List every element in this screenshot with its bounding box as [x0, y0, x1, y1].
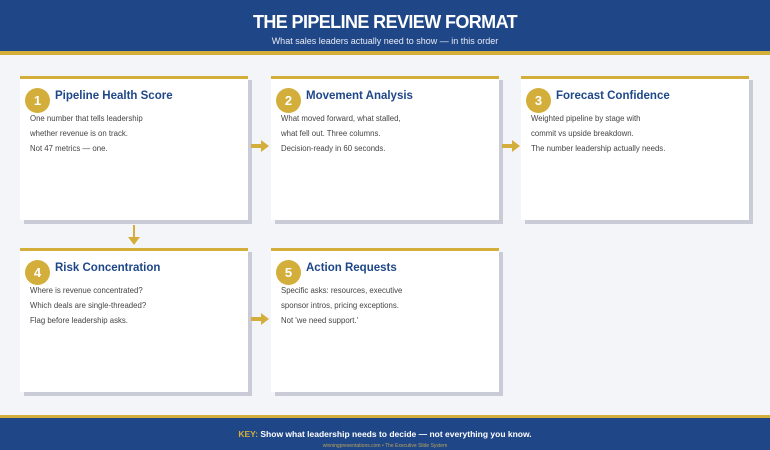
card 3: commit vs upside breakdown. — [531, 129, 634, 138]
card 2: What moved forward, what stalled, — [281, 114, 401, 123]
header — [0, 0, 770, 55]
header: What sales leaders actually need to show — in this order — [272, 36, 498, 46]
card 4 — [20, 248, 248, 392]
arrow down to 4 — [128, 225, 140, 245]
footer: winningpresentations.com • The Executive Slide System — [323, 443, 447, 449]
card 1: Not 47 metrics — one. — [30, 144, 108, 153]
card 5: Not 'we need support.' — [281, 316, 358, 325]
card 3: The number leadership actually needs. — [531, 144, 665, 153]
card 1: 1 — [34, 93, 41, 108]
card 5: 5 — [285, 265, 292, 280]
footer: KEY: Show what leadership needs to decide — not everything you know. — [238, 429, 532, 439]
card 3: 3 — [535, 93, 542, 108]
card 2 — [271, 76, 499, 220]
card 2: what fell out. Three columns. — [281, 129, 381, 138]
card 4: Which deals are single-threaded? — [30, 301, 146, 310]
card 1: whether revenue is on track. — [30, 129, 128, 138]
card 3 — [521, 76, 749, 220]
card 4: 4 — [34, 265, 41, 280]
card 4: Where is revenue concentrated? — [30, 286, 143, 295]
card 5: Specific asks: resources, executive — [281, 286, 402, 295]
card 5 — [271, 248, 499, 392]
card 1 — [20, 76, 248, 220]
card 3: Forecast Confidence — [556, 90, 670, 102]
card 2: Decision-ready in 60 seconds. — [281, 144, 385, 153]
card 4: Flag before leadership asks. — [30, 316, 128, 325]
card 3: Weighted pipeline by stage with — [531, 114, 641, 123]
header: THE PIPELINE REVIEW FORMAT — [253, 12, 517, 32]
card 5: Action Requests — [306, 262, 397, 274]
footer — [0, 415, 770, 450]
arrow 2 to 3 — [502, 140, 520, 152]
arrow 1 to 2 — [251, 140, 269, 152]
card 5: sponsor intros, pricing exceptions. — [281, 301, 399, 310]
card 1: One number that tells leadership — [30, 114, 143, 123]
arrow 4 to 5 — [251, 313, 269, 325]
card 2: 2 — [285, 93, 292, 108]
card 4: Risk Concentration — [55, 262, 160, 274]
card 2: Movement Analysis — [306, 90, 413, 102]
card 1: Pipeline Health Score — [55, 90, 173, 102]
